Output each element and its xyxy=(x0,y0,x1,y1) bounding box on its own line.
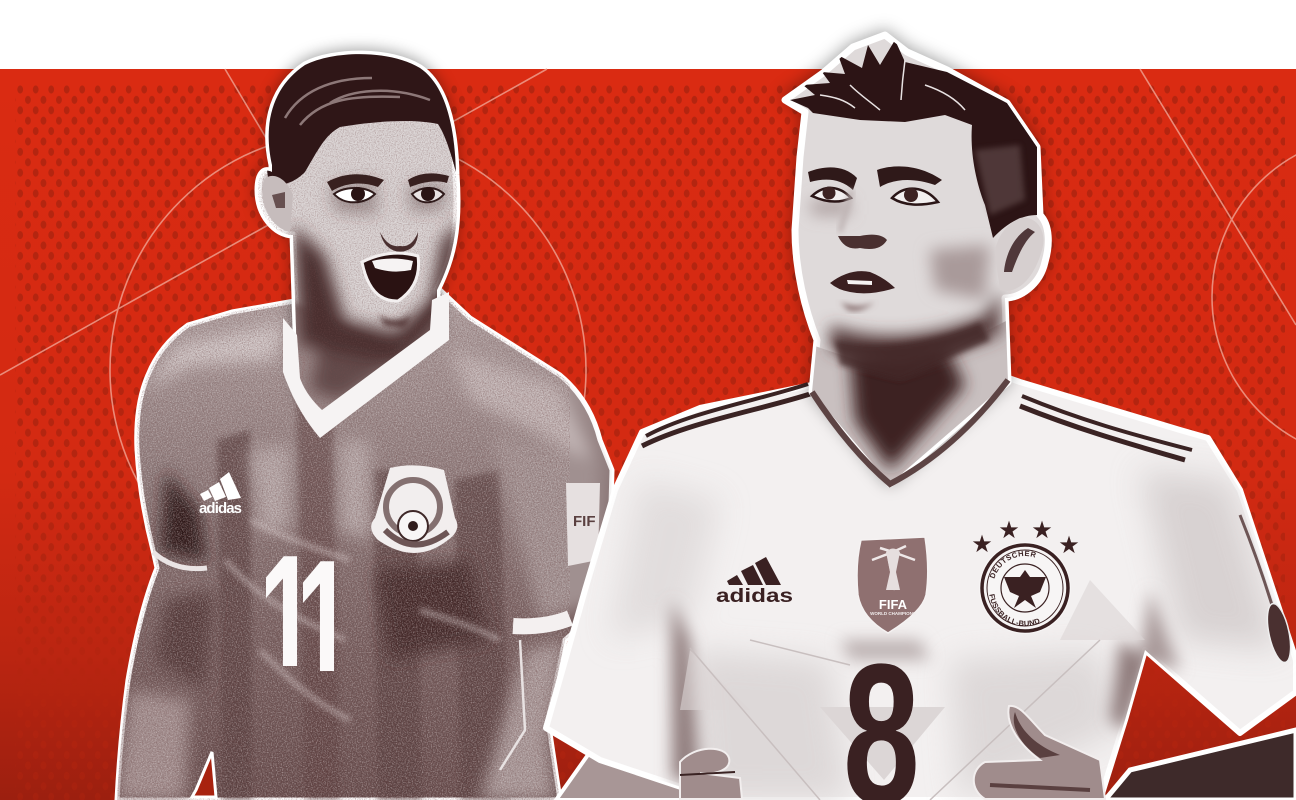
left hand xyxy=(680,749,742,799)
pitch lines xyxy=(0,69,1296,608)
right player body silhouette xyxy=(546,375,1296,800)
four stars: ★ xyxy=(998,517,1020,544)
German federation crest xyxy=(980,543,1070,633)
right player arm tattoo xyxy=(1105,730,1296,800)
hair xyxy=(266,53,456,184)
left player body silhouette xyxy=(117,290,612,800)
lips xyxy=(830,271,895,311)
eyebrows xyxy=(808,166,942,190)
head silhouette xyxy=(258,54,457,415)
left player head and neck xyxy=(258,54,457,415)
neck tone xyxy=(812,320,1008,484)
FIFA world champions badge xyxy=(857,537,928,633)
right player jersey shading xyxy=(610,470,1280,800)
right player collar xyxy=(812,380,1008,484)
left player jersey shading xyxy=(110,290,605,800)
nose xyxy=(380,232,418,252)
player: Germany number 8 xyxy=(543,22,1296,800)
adidas logo on chest xyxy=(716,557,793,607)
eyes xyxy=(334,187,444,202)
Mexico federation badge xyxy=(371,465,457,553)
German federation crest: DEUTSCHER xyxy=(990,550,1036,578)
adidas logo on chest: adidas xyxy=(716,586,793,607)
left player sleeve patch: FIF xyxy=(573,513,596,530)
left shoulder stripes xyxy=(642,384,810,446)
ear xyxy=(995,218,1043,291)
arm and torso separation xyxy=(500,640,525,770)
ear xyxy=(262,176,293,232)
head silhouette xyxy=(785,35,1048,484)
right player left forearm xyxy=(556,752,695,800)
left player collar xyxy=(283,292,449,438)
right player head and neck xyxy=(785,35,1048,484)
open mouth xyxy=(362,253,419,301)
beard and face shading xyxy=(293,180,462,400)
jersey number 11: 1 xyxy=(296,522,353,733)
FIFA world champions badge: FIFA xyxy=(879,597,908,612)
jersey number 11: 1 xyxy=(259,517,316,728)
FIFA world champions badge: WORLD CHAMPIONS xyxy=(870,611,916,616)
face grain xyxy=(258,121,457,409)
left player adidas logo: adidas xyxy=(199,500,242,517)
right sleeve badge xyxy=(1240,515,1295,664)
right shoulder stripes xyxy=(1020,396,1192,460)
face shading xyxy=(810,200,1000,370)
jersey grain xyxy=(110,290,570,800)
left player sleeve trims xyxy=(153,552,570,626)
four stars: ★ xyxy=(971,531,993,558)
eyes xyxy=(812,186,938,205)
four stars: ★ xyxy=(1058,532,1080,559)
nose xyxy=(838,235,887,249)
German federation crest: FUSSBALL-BUND xyxy=(989,594,1040,626)
left player red gap by arm xyxy=(192,752,216,797)
jersey number 11 xyxy=(266,556,334,671)
hair xyxy=(790,40,1037,238)
right hand xyxy=(974,706,1105,799)
neck tone xyxy=(295,294,437,410)
left player sleeve patch xyxy=(566,483,600,566)
four stars xyxy=(971,517,1080,559)
player: Mexico number 11 xyxy=(110,53,612,800)
four stars: ★ xyxy=(1031,517,1053,544)
eyebrows xyxy=(327,173,449,191)
left player adidas logo xyxy=(199,472,242,517)
